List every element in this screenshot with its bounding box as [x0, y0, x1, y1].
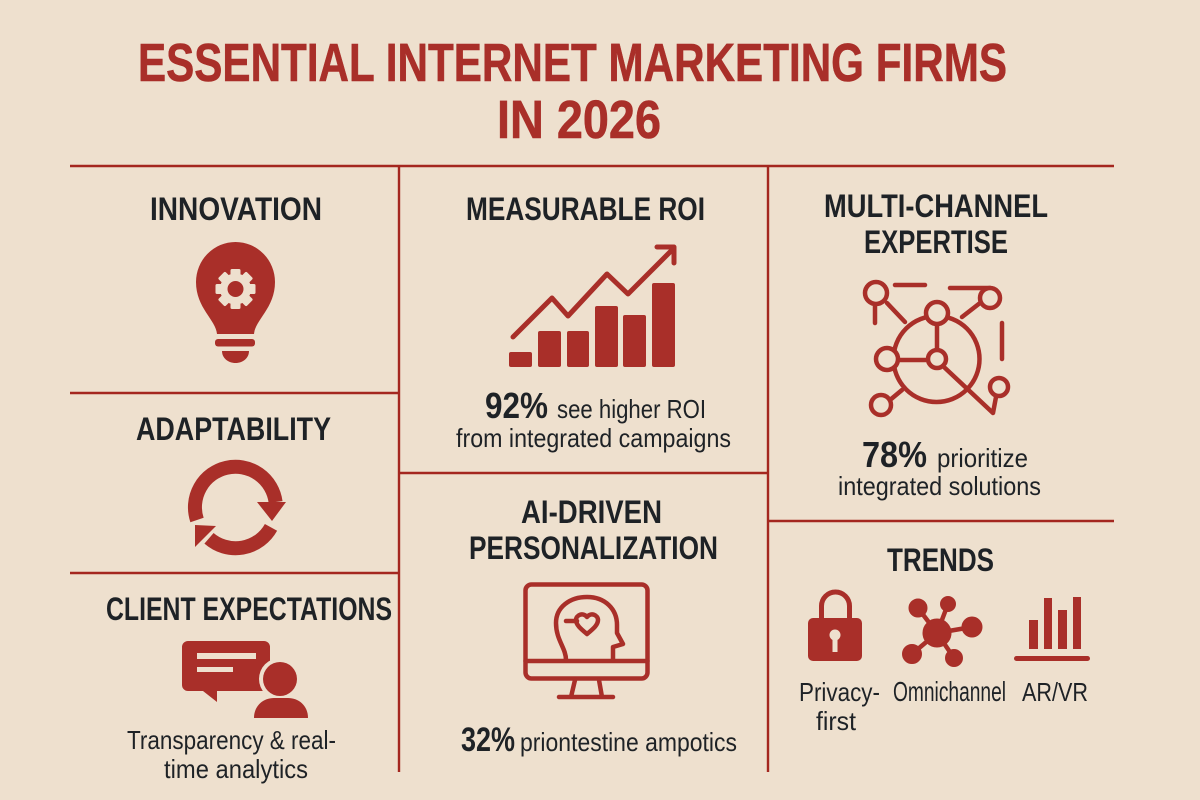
stat: 92 percent: from integrated campaigns: [456, 423, 731, 453]
label: privacy-first: Privacy-: [799, 677, 880, 707]
title: IN 2026: [497, 90, 661, 150]
chart: rising bars and arrow: [509, 247, 675, 367]
heading: adaptability: ADAPTABILITY: [136, 411, 331, 447]
heading: multi-channel expertise: MULTI-CHANNEL: [824, 188, 1048, 224]
caption: client expectations: time analytics: [164, 754, 308, 784]
heading: multi-channel expertise: EXPERTISE: [864, 224, 1008, 260]
label: AR/VR: AR/VR: [1022, 677, 1088, 707]
panel: adaptability: [136, 411, 331, 548]
panel: measurable roi: [456, 191, 731, 453]
stat: 32 percent: priontestine ampotics: [520, 727, 737, 757]
caption: client expectations: [127, 725, 336, 784]
stat: 92 percent: 92%: [485, 385, 548, 426]
icon: monitor with head and heart: [526, 584, 648, 697]
panel: ai-driven personalization: [461, 494, 737, 759]
heading: trends: TRENDS: [887, 542, 994, 578]
label: privacy-first: [799, 677, 880, 736]
icon: cycle arrows: [195, 467, 286, 548]
title: [138, 33, 1007, 150]
stat: 78 percent: integrated solutions: [838, 471, 1041, 501]
stat: 78 percent: [838, 434, 1041, 501]
heading: innovation: INNOVATION: [150, 191, 322, 227]
stat: 32 percent: 32%: [461, 721, 515, 759]
heading: ai-driven personalization: AI-DRIVEN: [521, 494, 662, 530]
caption: client expectations: Transparency & real-: [127, 725, 336, 755]
icon: light bulb with gear: [196, 242, 275, 363]
heading: ai-driven personalization: [469, 494, 718, 566]
icon: omnichannel hub: [902, 596, 982, 666]
panel: trends: [799, 542, 1090, 736]
label: omnichannel: Omnichannel: [893, 676, 1006, 707]
icon: chat bubble and person: [182, 641, 308, 718]
stat: 32 percent: [461, 721, 737, 759]
icon: network diagram: [865, 282, 1008, 415]
stat: 78 percent: 78%: [862, 434, 927, 475]
icon: padlock: [808, 592, 862, 661]
stat: 92 percent: [456, 385, 731, 453]
stat: 92 percent: see higher ROI: [557, 394, 706, 424]
heading: client expectations: CLIENT EXPECTATIONS: [106, 591, 392, 627]
heading: ai-driven personalization: PERSONALIZATION: [469, 530, 718, 566]
stat: 78 percent: prioritize: [937, 443, 1028, 473]
heading: measurable roi: MEASURABLE ROI: [466, 191, 705, 227]
panel: multi-channel expertise: [824, 188, 1048, 501]
panel: innovation: [150, 191, 322, 363]
panel: client expectations: [106, 591, 392, 784]
icon: AR/VR bars: [1014, 597, 1090, 661]
label: privacy-first: first: [816, 706, 857, 736]
heading: multi-channel expertise: [824, 188, 1048, 260]
